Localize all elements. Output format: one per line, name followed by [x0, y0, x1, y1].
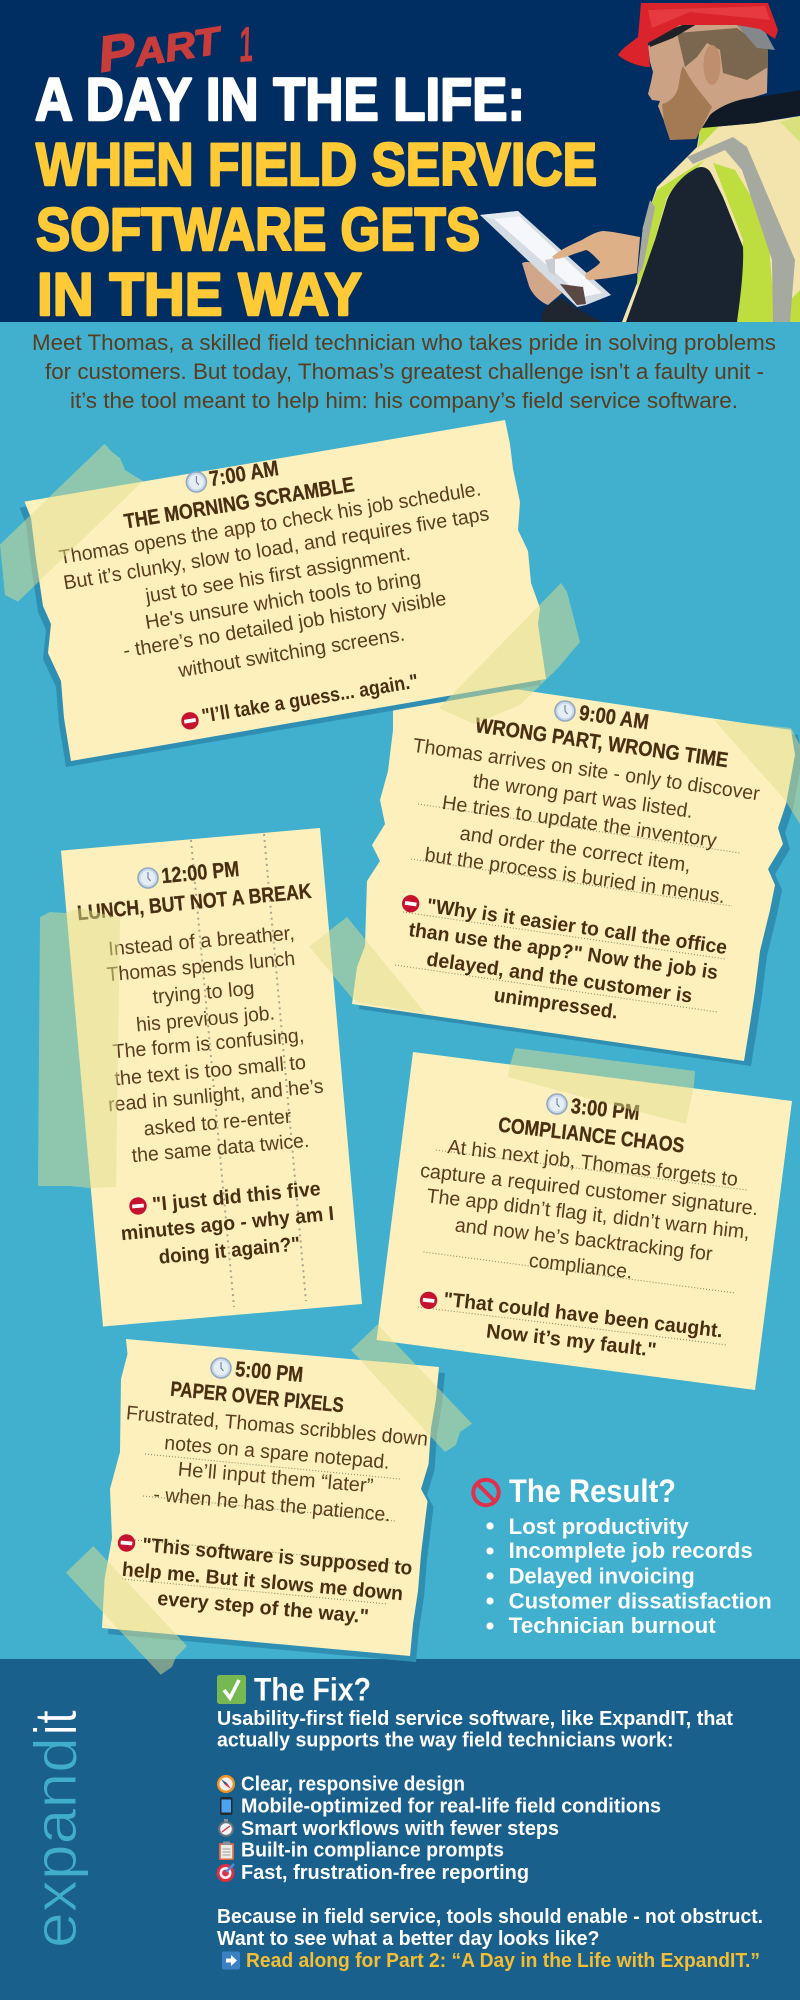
- time: 7:00 AM: [207, 456, 280, 491]
- quote: "That could have been caught.: [442, 1289, 724, 1342]
- fix list: Clear, responsive design: [241, 1774, 465, 1796]
- panel: the fix: [216, 1672, 763, 1972]
- body text: compliance.: [528, 1250, 634, 1283]
- body text: [419, 1136, 759, 1283]
- heading: WRONG PART, WRONG TIME: [474, 714, 730, 772]
- icon: no entry: [117, 1534, 136, 1552]
- body text: [106, 922, 324, 1167]
- quote: delayed, and the customer is: [425, 949, 694, 1008]
- body text: the same data twice.: [131, 1130, 310, 1167]
- quote: every step of the way.": [156, 1588, 370, 1628]
- icon: clipboard: [219, 1842, 234, 1860]
- heading: The Fix?: [254, 1672, 371, 1708]
- heading: The Result?: [509, 1473, 676, 1509]
- logo: expandit: expand: [22, 1737, 89, 1948]
- title: SOFTWARE GETS: [36, 196, 480, 263]
- tape: note 2 top right: [714, 720, 800, 824]
- time: 3:00 PM: [570, 1094, 641, 1125]
- body text: Frustrated, Thomas scribbles down: [125, 1402, 429, 1451]
- body text: the wrong part was listed.: [471, 770, 694, 823]
- icon: clock: [186, 472, 206, 492]
- fix list: Built-in compliance prompts: [241, 1840, 504, 1862]
- intro text: for customers. But today, Thomas’s greatest challenge isn’t a faulty unit -: [45, 359, 764, 384]
- tape: note 5 bottom left: [66, 1546, 187, 1675]
- icon: target: [216, 1864, 234, 1882]
- body text: - there’s no detailed job history visible: [122, 588, 448, 662]
- photo: technician with tablet: [480, 3, 800, 322]
- closing text: Want to see what a better day looks like?: [217, 1928, 600, 1950]
- heading: PAPER OVER PIXELS: [169, 1378, 345, 1417]
- body text: just to see his first assignment.: [143, 543, 412, 608]
- label: part 1: 1: [237, 16, 255, 73]
- body text: Thomas spends lunch: [106, 948, 296, 986]
- panel: 7:00 AM note: [20, 420, 546, 767]
- quote: [407, 895, 728, 1024]
- panel: 3:00 PM note: [376, 1052, 792, 1390]
- label: part 1: PART: [94, 8, 226, 83]
- body text: He tries to update the inventory: [441, 792, 718, 852]
- quote: doing it again?": [158, 1233, 301, 1269]
- body text: capture a required customer signature.: [419, 1160, 759, 1220]
- heading: THE MORNING SCRAMBLE: [122, 473, 356, 534]
- body text: At his next job, Thomas forgets to: [446, 1136, 739, 1191]
- time: 12:00 PM: [160, 857, 240, 888]
- intro text: it’s the tool meant to help him: his company’s field service software.: [70, 388, 738, 413]
- body text: - when he has the patience.: [153, 1484, 392, 1526]
- closing text: [217, 1906, 763, 1950]
- quote: [121, 1534, 413, 1628]
- icon: stopwatch: [218, 1819, 234, 1837]
- body text: but the process is buried in menus.: [423, 844, 726, 908]
- icon: compass: [217, 1775, 235, 1793]
- body text: without switching screens.: [176, 624, 406, 682]
- icon: prohibited: [473, 1480, 499, 1505]
- icon: green check: [217, 1675, 246, 1704]
- result list: Lost productivity: [509, 1514, 689, 1539]
- fix list: [216, 1774, 661, 1884]
- quote: "I just did this five: [151, 1178, 322, 1216]
- tape: note 1 to note 2: [439, 583, 580, 724]
- tape: note 3 left: [38, 908, 120, 1188]
- result list: Technician burnout: [509, 1613, 716, 1638]
- footer band: [0, 1659, 800, 2000]
- title: WHEN FIELD SERVICE: [36, 131, 597, 198]
- title: [35, 66, 597, 328]
- tape: note 2 bottom left: [309, 917, 426, 1014]
- body text: He’ll input them “later”: [177, 1459, 374, 1498]
- intro text: Meet Thomas, a skilled field technician who takes pride in solving problems: [32, 330, 776, 355]
- time: 5:00 PM: [234, 1357, 304, 1387]
- body text: The app didn’t flag it, didn’t warn him,: [425, 1185, 751, 1244]
- quote: "Why is it easier to call the office: [425, 895, 728, 959]
- body text: Thomas opens the app to check his job schedule.: [58, 478, 483, 569]
- fix list: Fast, frustration-free reporting: [241, 1862, 529, 1884]
- icon: no entry: [401, 894, 421, 914]
- body text: his previous job.: [135, 1003, 276, 1037]
- body text: Thomas arrives on site - only to discover: [411, 735, 761, 805]
- icon: no entry: [180, 711, 200, 731]
- intro text: [32, 330, 776, 413]
- panel: the result: [473, 1473, 772, 1638]
- result list: Incomplete job records: [509, 1538, 753, 1563]
- body text: and now he’s backtracking for: [454, 1214, 714, 1266]
- icon: no entry: [419, 1291, 438, 1310]
- tape: note 1 left: [0, 444, 143, 602]
- logo: expandit: it: [22, 1710, 89, 1736]
- body text: read in sunlight, and he’s: [107, 1076, 324, 1116]
- call to action: Read along for Part 2: “A Day in the Life with ExpandIT.”: [246, 1950, 760, 1972]
- fix list: Mobile-optimized for real-life field conditions: [241, 1796, 661, 1818]
- body text: The form is confusing,: [112, 1025, 305, 1063]
- icon: clock: [555, 701, 575, 721]
- title: IN THE WAY: [37, 261, 362, 328]
- icon: right arrow: [222, 1952, 240, 1970]
- header band: [0, 0, 800, 328]
- quote: help me. But it slows me down: [121, 1559, 404, 1605]
- title: A DAY IN THE LIFE:: [35, 66, 525, 133]
- icon: clock: [211, 1358, 231, 1378]
- quote: [120, 1178, 335, 1269]
- quote: minutes ago - why am I: [120, 1203, 335, 1245]
- label: part 1: [94, 8, 255, 83]
- body text: [125, 1402, 429, 1526]
- closing text: Because in field service, tools should enable - not obstruct.: [217, 1906, 763, 1928]
- body text: But it’s clunky, slow to load, and requires five taps: [62, 503, 491, 594]
- quote: unimpressed.: [492, 984, 619, 1024]
- quote: Now it’s my fault.": [485, 1320, 657, 1362]
- panel: 12:00 PM note: [61, 828, 362, 1326]
- panel: 9:00 AM note: [352, 671, 800, 1066]
- icon: clock: [138, 868, 158, 888]
- body text: the text is too small to: [114, 1052, 307, 1090]
- quote: than use the app?" Now the job is: [407, 919, 719, 984]
- result list: [486, 1514, 772, 1638]
- body text: Instead of a breather,: [107, 922, 296, 961]
- fix list: Smart workflows with fewer steps: [241, 1818, 559, 1840]
- body text: notes on a spare notepad.: [163, 1432, 391, 1474]
- quote: "I’ll take a guess... again.": [200, 671, 420, 728]
- body text: [58, 478, 491, 682]
- intro text: Usability-first field service software, like ExpandIT, that: [217, 1708, 733, 1730]
- tape: note 4 top: [508, 1048, 695, 1124]
- result list: Delayed invoicing: [509, 1564, 695, 1589]
- body text: asked to re-enter: [143, 1106, 292, 1140]
- quote: "This software is supposed to: [141, 1534, 413, 1580]
- icon: phone: [220, 1797, 232, 1815]
- body text: and order the correct item,: [458, 823, 692, 877]
- tape: note 5 top right: [351, 1324, 472, 1452]
- result list: Customer dissatisfaction: [509, 1589, 772, 1614]
- icon: no entry: [129, 1197, 147, 1215]
- body text: trying to log: [152, 978, 255, 1008]
- intro text: [217, 1708, 733, 1752]
- icon: clock: [547, 1094, 567, 1114]
- intro text: actually supports the way field technicians work:: [217, 1730, 674, 1752]
- body text: He's unsure which tools to bring: [144, 567, 422, 634]
- panel: 5:00 PM note: [102, 1339, 445, 1662]
- heading: COMPLIANCE CHAOS: [497, 1114, 685, 1158]
- body text: [411, 735, 761, 908]
- time: 9:00 AM: [578, 701, 650, 734]
- heading: LUNCH, BUT NOT A BREAK: [76, 880, 312, 925]
